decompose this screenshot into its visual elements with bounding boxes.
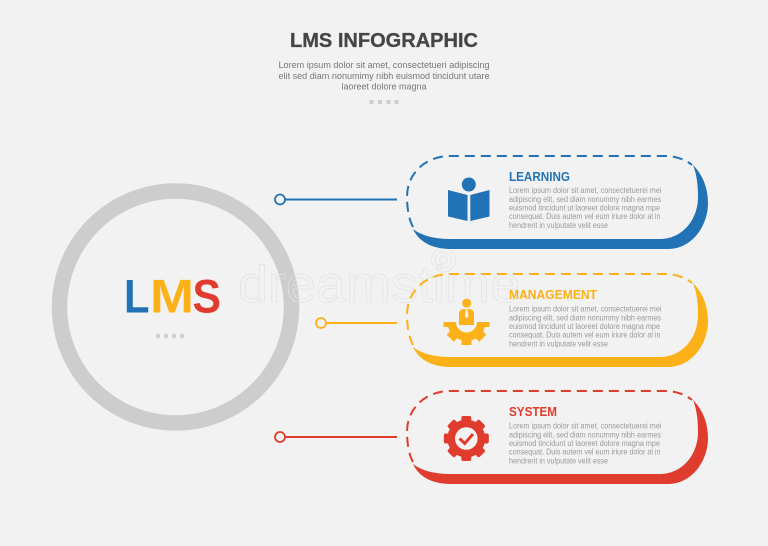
main circle ring <box>60 191 292 423</box>
LMS wordmark <box>124 270 221 322</box>
connector: learning <box>275 194 397 204</box>
body text: management <box>509 304 662 348</box>
connector: system <box>275 432 397 442</box>
heading: learning: LEARNING <box>509 170 570 184</box>
subtitle text block: laoreet dolore magna <box>342 82 427 92</box>
body text: system: consequat. Duis autem vel eum iriure dolor al in <box>509 448 660 456</box>
body text: management: euismod tincidunt ut laoreet dolore magna mpe <box>509 322 660 331</box>
heading: system: SYSTEM <box>509 405 557 419</box>
body text: learning: euismod tincidunt ut laoreet dolore magna mpe <box>509 204 660 212</box>
title dots <box>370 100 398 104</box>
LMS wordmark: S <box>192 270 221 322</box>
card frame: learning <box>407 156 708 249</box>
body text: management: adipiscing elit, sed diam nonummy nibh earmes <box>509 313 661 322</box>
panel: system <box>407 391 708 484</box>
LMS wordmark: M <box>150 270 194 322</box>
body text: system: euismod tincidunt ut laoreet dolore magna mpe <box>509 439 660 448</box>
subtitle text block: elit sed diam nonumimy nibh euismod tincidunt utare <box>278 71 490 82</box>
watermark: dreamstime <box>238 256 520 314</box>
body text: system: hendrerit in vulputate velit esse <box>509 456 608 466</box>
body text: learning: adipiscing elit, sed diam nonummy nibh earmes <box>509 195 661 204</box>
icon: person on gear <box>444 299 490 345</box>
body text: learning: Lorem ipsum dolor sit amet, consectetuerei mei <box>509 186 662 195</box>
panel: learning <box>407 156 708 249</box>
connector: management <box>316 318 397 328</box>
LMS wordmark: L <box>124 270 150 322</box>
body text: learning <box>509 186 662 230</box>
body text: management: Lorem ipsum dolor sit amet, consectetuerei mei <box>509 304 662 314</box>
heading: management: MANAGEMENT <box>509 288 597 302</box>
icon: gear with check <box>444 416 489 461</box>
subtitle text block: Lorem ipsum dolor sit amet, consectetueri adipiscing <box>278 60 490 71</box>
card frame: management <box>407 274 708 367</box>
body text: system <box>509 422 662 466</box>
subtitle text block <box>278 60 490 92</box>
panel: management <box>407 274 708 367</box>
title: LMS INFOGRAPHIC <box>290 29 478 52</box>
circle dots <box>156 334 184 338</box>
body text: management: hendrerit in vulputate velit esse <box>509 340 608 348</box>
body text: learning: consequat. Duis autem vel eum iriure dolor al in <box>509 212 660 221</box>
body text: system: Lorem ipsum dolor sit amet, consectetuerei mei <box>509 422 662 430</box>
body text: learning: hendrerit in vulputate velit esse <box>509 221 608 230</box>
card frame: system <box>407 391 708 484</box>
body text: management: consequat. Duis autem vel eum iriure dolor al in <box>509 330 660 340</box>
icon: open book with reader <box>448 178 490 221</box>
body text: system: adipiscing elit, sed diam nonummy nibh earmes <box>509 430 661 439</box>
